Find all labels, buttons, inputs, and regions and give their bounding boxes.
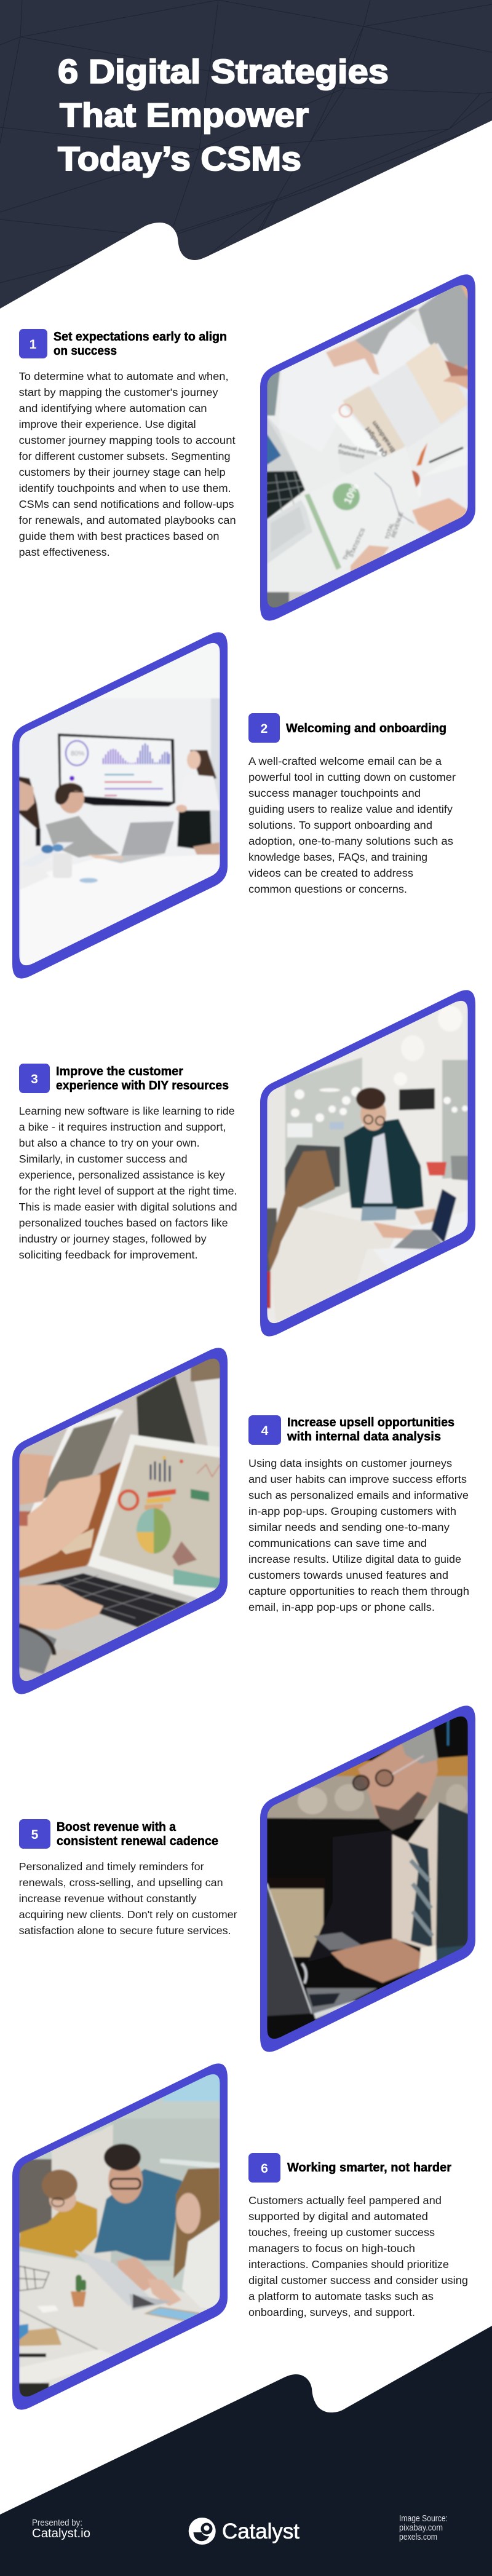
body text 3: This is made easier with digital solutions and [19, 1201, 237, 1213]
body text 2 [248, 755, 456, 895]
photo panel 1: documents on a desk: 10% [341, 482, 361, 506]
heading 6: Working smarter, not harder [287, 2161, 451, 2175]
number badge 2 [248, 713, 280, 743]
man in suit [308, 1725, 468, 1962]
image sources: Image Source: [399, 2514, 448, 2524]
body text 4: in-app pop-ups. Grouping customers with [248, 1505, 456, 1517]
body text 1: past effectiveness. [19, 546, 110, 558]
body text 1: for renewals, and automated playbooks can [19, 514, 236, 526]
image sources: pexels.com [399, 2532, 437, 2542]
wall screen chart: 80% [71, 750, 84, 757]
dashboard screen [88, 1434, 220, 1600]
photo panel 1: documents on a desk: THE [342, 548, 352, 561]
woman with dreadlocks [173, 2168, 220, 2310]
header background [0, 0, 492, 309]
laptop [74, 2250, 172, 2310]
body text 2: common questions or concerns. [248, 883, 407, 895]
title: Today’s CSMs [58, 140, 301, 178]
body text 4: and user habits can improve success efforts [248, 1473, 467, 1485]
number badge 1 [19, 329, 47, 358]
number badge 4: 4 [261, 1424, 269, 1438]
body text 2: guiding users to realize value and identify [248, 803, 453, 815]
body text 5: satisfaction alone to secure future services. [19, 1924, 231, 1937]
body text 5: acquiring new clients. Don't rely on customer [19, 1908, 237, 1921]
body text 2: A well-crafted welcome email can be a [248, 755, 442, 767]
photo panel 1: documents on a desk: Statement [338, 448, 365, 460]
heading 3: Improve the customer [56, 1065, 183, 1078]
body text 3: soliciting feedback for improvement. [19, 1249, 198, 1261]
body text 6 [248, 2194, 468, 2318]
body text 2: adoption, one-to-many solutions such as [248, 835, 453, 847]
body text 6: onboarding, surveys, and support. [248, 2306, 415, 2318]
photo panel 4: laptop with data dashboard [12, 1348, 228, 1694]
man leaning over desk [344, 1088, 424, 1221]
body text 5: increase revenue without constantly [19, 1892, 197, 1905]
heading 2: Welcoming and onboarding [286, 722, 446, 735]
body text 6: interactions. Companies should prioritize [248, 2258, 449, 2270]
wall screen chart [58, 733, 175, 807]
body text 3: industry or journey stages, followed by [19, 1233, 207, 1245]
body text 1: improve their experience. Use digital [19, 418, 196, 430]
body text 6: digital customer success and consider using [248, 2274, 468, 2286]
body text 3: a bike - it requires instruction and support, [19, 1121, 226, 1133]
photo panel 2: team meeting with dashboard screen [12, 632, 228, 979]
title: That Empower [60, 96, 309, 134]
image sources [399, 2514, 448, 2542]
wordmark: Catalyst [222, 2519, 300, 2543]
body text 1: start by mapping the customer's journey [19, 386, 218, 398]
body text 3 [19, 1105, 237, 1261]
heading 1: Set expectations early to align [54, 330, 227, 344]
laptop [267, 1884, 377, 2019]
body text 5: Personalized and timely reminders for [19, 1860, 204, 1873]
heading 1 [54, 330, 227, 358]
number badge 4 [248, 1415, 281, 1445]
icon: Catalyst logo [189, 2518, 216, 2545]
body text 4: such as personalized emails and informative [248, 1489, 469, 1501]
body text 3: but also a chance to try on your own. [19, 1137, 200, 1149]
seated man [46, 783, 119, 858]
heading 1: on success [54, 344, 117, 358]
title: 6 Digital Strategies [58, 52, 389, 90]
heading 4 [287, 1416, 454, 1444]
body text 5: renewals, cross-selling, and upselling can [19, 1876, 223, 1889]
body text 4: similar needs and sending one-to-many [248, 1521, 450, 1533]
section 6: working smarter [12, 2063, 468, 2410]
number badge 5 [19, 1819, 50, 1849]
section 4: upsell opportunities [12, 1348, 469, 1694]
body text 1: CSMs can send notifications and follow-ups [19, 498, 234, 510]
section 2: welcoming and onboarding [12, 632, 456, 979]
heading 4: with internal data analysis [287, 1430, 441, 1444]
presenter [176, 750, 220, 851]
heading 5: Boost revenue with a [57, 1820, 177, 1834]
photo panel 3: colleagues in an office [260, 990, 475, 1337]
body text 3: Learning new software is like learning to ride [19, 1105, 235, 1117]
body text 3: personalized touches based on factors like [19, 1217, 228, 1229]
body text 2: powerful tool in cutting down on customer [248, 771, 456, 783]
section 1: set expectations [19, 274, 475, 621]
body text 4: Using data insights on customer journeys [248, 1457, 452, 1469]
body text 5 [19, 1860, 237, 1937]
presented by: Catalyst.io [32, 2527, 90, 2540]
photo panel 1: documents on a desk: STATISTICS [348, 527, 366, 558]
body text 4: customers towards unused features and [248, 1569, 448, 1581]
footer [0, 2326, 492, 2576]
body text 4: capture opportunities to reach them through [248, 1585, 469, 1597]
heading 5 [57, 1820, 218, 1848]
body text 1: To determine what to automate and when, [19, 370, 229, 382]
heading 3: experience with DIY resources [56, 1079, 229, 1092]
number badge 5: 5 [31, 1828, 39, 1842]
photo panel 1: documents on a desk: Breakdown [370, 419, 397, 454]
body text 4: email, in-app pop-ups or phone calls. [248, 1601, 435, 1613]
body text 3: experience, personalized assistance is key [19, 1169, 225, 1181]
body text 6: touches, freeing up customer success [248, 2226, 435, 2238]
photo panel 1: documents on a desk: TOTAL [384, 522, 395, 540]
presented by [32, 2518, 90, 2540]
body text 1: customer journey mapping tools to account [19, 434, 236, 446]
number badge 3: 3 [31, 1072, 38, 1086]
body text 3: Similarly, in customer success and [19, 1153, 188, 1165]
body text 1: and identifying where automation can [19, 402, 207, 414]
body text 4: increase results. Utilize digital data to guide [248, 1553, 461, 1565]
heading 4: Increase upsell opportunities [287, 1416, 454, 1429]
body text 6: managers to focus on high-touch [248, 2242, 415, 2254]
body text 1: guide them with best practices based on [19, 530, 220, 542]
title [58, 52, 389, 178]
body text 3: for the right level of support at the right time. [19, 1185, 237, 1197]
number badge 1: 1 [30, 338, 37, 352]
photo panel 6: man helping students at a laptop [12, 2063, 228, 2410]
body text 6: a platform to automate tasks such as [248, 2290, 434, 2302]
body text 2: knowledge bases, FAQs, and training [248, 851, 427, 863]
body text 2: success manager touchpoints and [248, 787, 421, 799]
photo panel 1: documents on a desk: Annual Income [338, 442, 378, 456]
image sources: pixabay.com [399, 2523, 443, 2533]
body text 2: solutions. To support onboarding and [248, 819, 432, 831]
body text 6: Customers actually feel pampered and [248, 2194, 442, 2207]
photo panel 1: documents on a desk [260, 274, 475, 621]
presented by: Presented by: [32, 2518, 82, 2528]
body text 2: videos can be created to address [248, 867, 413, 879]
man in blue sweater [94, 2144, 182, 2261]
heading 3 [56, 1065, 229, 1092]
number badge 6 [248, 2153, 280, 2183]
photo panel 1: documents on a desk: REVENUE [390, 511, 404, 539]
body text 1: identify touchpoints and when to use them. [19, 482, 231, 494]
body text 4 [248, 1457, 469, 1613]
seated woman [19, 776, 42, 847]
number badge 3 [19, 1064, 50, 1093]
number badge 2: 2 [261, 722, 268, 736]
body text 6: supported by digital and automated [248, 2210, 428, 2222]
body text 1 [19, 370, 236, 558]
section 5: renewal cadence [19, 1705, 475, 2052]
heading 5: consistent renewal cadence [57, 1835, 218, 1848]
boy in mustard hoodie [19, 2170, 97, 2258]
body text 1: for different customer subsets. Segmenting [19, 450, 231, 462]
photo panel 1: documents on a desk: Q4 Budget [363, 425, 389, 458]
body text 1: customers by their journey stage can help [19, 466, 226, 478]
potted cactus [71, 2275, 86, 2307]
body text 4: communications can save time and [248, 1537, 427, 1549]
woman at laptop [267, 1150, 414, 1322]
photo panel 5: businessman with phone [260, 1705, 475, 2052]
section 3: DIY resources [19, 990, 475, 1337]
number badge 6: 6 [261, 2162, 268, 2176]
